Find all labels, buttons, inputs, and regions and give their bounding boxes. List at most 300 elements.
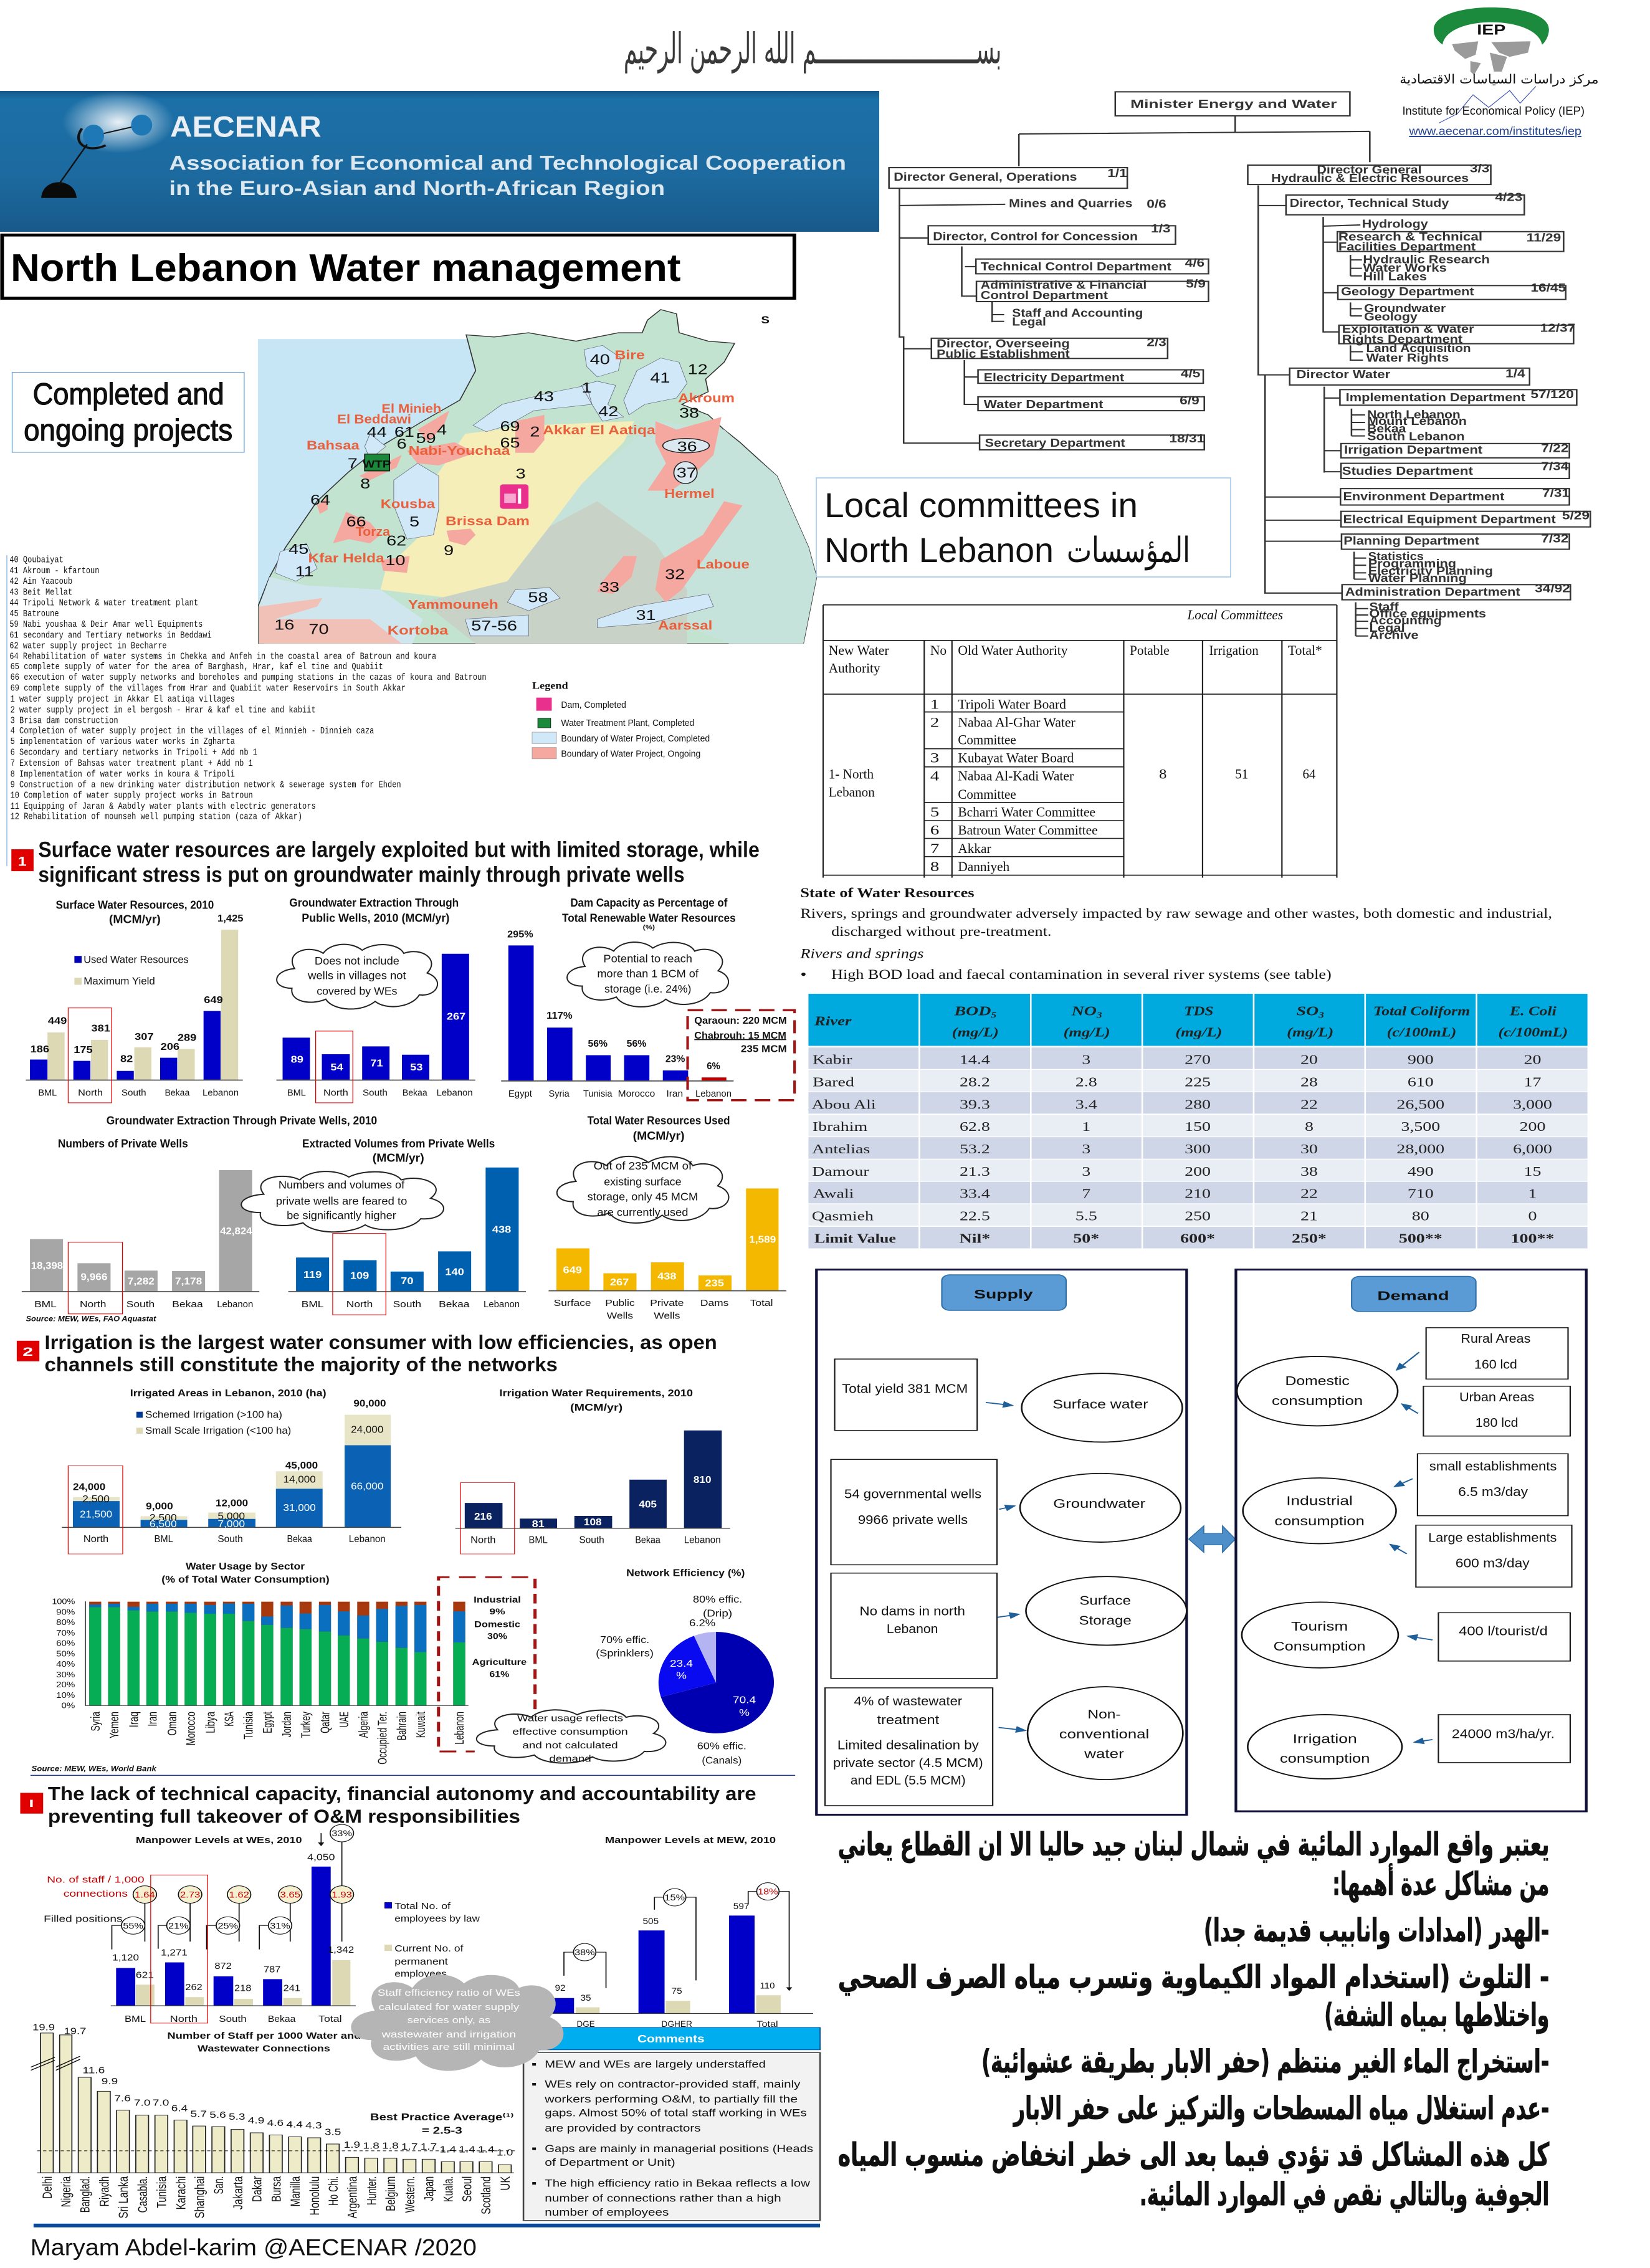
- callout: Lebanon sector shares: Agriculture: [472, 1657, 527, 1667]
- org box: technical control: Technical Control Department: [981, 260, 1171, 273]
- IEP wordmark: IEP: [1477, 22, 1505, 38]
- map project numbers: 61: [394, 424, 414, 440]
- chart: water usage by sector: [52, 1561, 469, 1765]
- demand: irrigation consumption: Irrigation: [1293, 1732, 1357, 1746]
- chart: staff per 1000 connections: UK: [497, 2176, 513, 2191]
- legend item: project completed: [532, 732, 710, 743]
- row: Bared: 17: [1524, 1075, 1541, 1090]
- row: Antelias: 30: [1300, 1142, 1318, 1156]
- chart: staff per 1000 connections: 6.4: [171, 2104, 188, 2113]
- comments text: gaps. Almost 50% of total staff working in WEs: [545, 2107, 807, 2119]
- chart: manpower levels at MEW: Total: [756, 2019, 778, 2029]
- chart: dam capacity: 117%: [546, 1011, 573, 1021]
- map project numbers: 40: [590, 351, 610, 368]
- row: Ibrahim: Ibrahim: [813, 1120, 867, 1134]
- row: Qasmieh: 22.5: [960, 1209, 990, 1224]
- chart: dam capacity: Iran: [667, 1089, 683, 1099]
- chart: irrigation water requirements: South: [579, 1534, 604, 1545]
- chart: irrigated areas: 7,000: [217, 1518, 245, 1529]
- comments text: of Department or Unit): [545, 2156, 675, 2168]
- org sub-items: administration: Archive: [1369, 629, 1419, 642]
- filled position circles: 55%: [123, 1921, 143, 1931]
- map place names: Kousba: [381, 497, 435, 511]
- filled position circles: 21%: [168, 1921, 189, 1931]
- chart: irrigated areas: 24,000: [351, 1424, 383, 1435]
- chart: staff per 1000 connections: Casabla.: [135, 2176, 150, 2213]
- chart: dam capacity: 23%: [665, 1054, 685, 1064]
- org box: research: [1337, 231, 1563, 254]
- text block: state of water resources: Rivers, springs and groundwater adversely impacted by raw sewage and other wastes, both domestic and industrial,: [800, 905, 1552, 921]
- org box: director water: [1290, 368, 1530, 385]
- arabic text block: water sector problems: [838, 1826, 1549, 2213]
- chart: irrigation water requirements: Irrigation Water Requirements, 2010: [499, 1388, 693, 1399]
- chart: network efficiency pie: 70.4: [733, 1694, 756, 1705]
- map project numbers: [274, 351, 708, 637]
- org sub-items: hydraulic research: Hill Lakes: [1363, 270, 1427, 284]
- chart: surface water resources: Surface Water Resources, 2010: [56, 899, 214, 912]
- chart: staff per 1000 connections: Banglad.: [77, 2176, 92, 2213]
- heading: local committees: Local committees in: [824, 485, 1138, 525]
- map project numbers: 59: [416, 430, 436, 446]
- callout: water usage note: [477, 1710, 665, 1764]
- icon: AECENAR logo: [41, 115, 152, 198]
- org sub-items: administration: Staff: [1369, 601, 1399, 614]
- chart: manpower levels at WEs: 1,342: [328, 1945, 354, 1955]
- demand: industrial consumption: 6.5 m3/day: [1458, 1485, 1528, 1499]
- banner subtitle: Association for Economical and Technological Cooperation: [169, 151, 846, 174]
- callout: Lebanon sector shares: [439, 1577, 535, 1751]
- chart: public wells extraction: 54: [330, 1062, 343, 1073]
- chart: extracted volumes: 119: [303, 1270, 322, 1280]
- row: Kabir: 900: [1408, 1053, 1434, 1067]
- table body rows: Committee: [958, 732, 1016, 747]
- row: Damour: 15: [1524, 1165, 1541, 1179]
- chart: private wells numbers: BML: [34, 1299, 57, 1310]
- supply: non-conventional water: private sector (4.5 MCM): [833, 1756, 983, 1770]
- table body rows: Akkar: [958, 841, 991, 856]
- chart: manpower levels at MEW: 35: [581, 1993, 591, 2003]
- row: Qasmieh: 5.5: [1075, 1209, 1097, 1224]
- source note: Source: MEW, WEs, FAO Aquastat: [26, 1315, 156, 1323]
- map project numbers: 9: [444, 542, 454, 558]
- legend item: project ongoing: [532, 748, 700, 759]
- callout: storage potential: storage (i.e. 24%): [604, 984, 691, 996]
- chart: water usage by sector: Libya: [204, 1711, 217, 1733]
- row: Ibrahim: 62.8: [960, 1120, 990, 1134]
- chart: irrigation water requirements: [455, 1388, 730, 1554]
- callout: private wells feared higher: private wells are feared to: [276, 1196, 407, 1208]
- institute link: www.aecenar.com/institutes/iep: [1408, 124, 1581, 138]
- callout: Lebanon sector shares: 30%: [487, 1632, 507, 1641]
- org sub-items: planning: Programming: [1368, 558, 1456, 570]
- chart: staff per 1000 connections: Sri Lanka: [116, 2176, 131, 2218]
- chart: staff per 1000 connections: Argentina: [345, 2176, 360, 2218]
- chart: network efficiency pie: Network Efficiency (%): [626, 1567, 745, 1578]
- supply button: Supply: [974, 1287, 1033, 1302]
- icon: water treatment plant: [363, 454, 391, 471]
- callout: Lebanon sector shares: Domestic: [474, 1619, 520, 1629]
- section heading: channels still constitute the majority of the networks: [45, 1354, 558, 1375]
- row: Qasmieh: Qasmieh: [812, 1209, 874, 1224]
- org box: director water: Director Water: [1297, 368, 1390, 381]
- chart: staff per 1000 connections: Number of Staff per 1000 Water and: [167, 2031, 361, 2041]
- map project numbers: 37: [677, 464, 697, 481]
- annotation: staff per connections: connections: [64, 1889, 128, 1899]
- legend item: project ongoing: Boundary of Water Project, Ongoing: [561, 749, 700, 759]
- row: Abou Ali: 39.3: [960, 1097, 990, 1112]
- org box: irrigation: Irrigation Department: [1344, 444, 1482, 456]
- callout: staff efficiency ratio: Staff efficiency ratio of WEs: [378, 1988, 520, 1998]
- comments text: number of employees: [545, 2206, 669, 2218]
- map place names: El Beddawi: [337, 412, 411, 426]
- chart: surface water resources: 449: [48, 1016, 67, 1026]
- chart: staff per 1000 connections: San.: [211, 2176, 226, 2194]
- org sub-items: groundwater: [1364, 302, 1446, 323]
- chart: private wells numbers: 9,966: [80, 1272, 107, 1282]
- org box: geology: 16/45: [1530, 282, 1566, 294]
- table body rows: 3: [930, 750, 939, 766]
- chart: manpower levels at MEW: DGHER: [661, 2019, 692, 2029]
- demand: domestic consumption: Rural Areas: [1461, 1332, 1530, 1346]
- table caption: Local Committees: [1187, 607, 1283, 622]
- supply: non-conventional water: 4% of wastewater: [854, 1694, 962, 1708]
- annotation: best practice average: [370, 2112, 514, 2136]
- supply: groundwater: [831, 1459, 1181, 1565]
- org sub-items: land acquisition: Land Acquisition: [1366, 342, 1471, 355]
- demand: domestic consumption: 180 lcd: [1476, 1416, 1519, 1430]
- row: Ibrahim: 1: [1082, 1120, 1090, 1134]
- ratio circles: 1.93: [331, 1890, 352, 1900]
- ratio circles: 3.65: [280, 1890, 300, 1900]
- chart: water usage by sector: 90%: [56, 1607, 75, 1616]
- chart: water usage by sector: 100%: [52, 1596, 75, 1606]
- org sub-items: staff and legal: Staff and Accounting: [1012, 307, 1143, 320]
- org box: control for concession: Director, Control for Concession: [933, 230, 1138, 243]
- chart: staff per 1000 connections: 7.6: [114, 2094, 131, 2104]
- org box: electrical equipment: [1341, 510, 1590, 527]
- org box: water department: Water Department: [984, 398, 1104, 411]
- org sub-items: regions: Bekaa: [1367, 422, 1406, 436]
- row: Ibrahim: 150: [1185, 1120, 1211, 1134]
- chart: water usage by sector: Bahrain: [395, 1712, 409, 1740]
- filled position circles: [122, 1824, 353, 1934]
- supply: surface water: [835, 1359, 1182, 1442]
- demand: tourism consumption: 400 l/tourist/d: [1459, 1624, 1548, 1639]
- org box: research: 11/29: [1527, 231, 1561, 244]
- chart: staff per 1000 connections: 1.7: [401, 2142, 417, 2151]
- chart: public wells extraction: Groundwater Extraction Through: [289, 897, 459, 910]
- chart: surface water resources: (MCM/yr): [109, 913, 161, 926]
- panel: comments: ▪: [532, 2059, 536, 2070]
- chart: irrigated areas: North: [83, 1533, 108, 1545]
- map project numbers: 45: [289, 541, 308, 557]
- table body rows: 4: [930, 768, 940, 784]
- chart: extracted volumes: South: [393, 1299, 421, 1310]
- org box: administrative and financial: 5/9: [1186, 278, 1206, 290]
- map project numbers: 4: [437, 421, 447, 438]
- chart: network efficiency pie: 70% effic.: [600, 1634, 649, 1646]
- comments text: WEs rely on contractor-provided staff, mainly: [545, 2078, 801, 2090]
- demand: industrial consumption: Industrial: [1286, 1494, 1353, 1508]
- text block: state of water resources: Rivers and springs: [799, 946, 923, 961]
- map project numbers: 65: [500, 434, 520, 451]
- chart: water usage by sector: 30%: [56, 1670, 75, 1679]
- table body rows: [829, 697, 1316, 874]
- chart: extracted volumes: BML: [302, 1299, 324, 1310]
- org box: planning: 7/32: [1541, 533, 1568, 545]
- table body rows: Batroun Water Committee: [958, 822, 1098, 838]
- map project numbers: 16: [274, 616, 294, 633]
- chart: water usage by sector: 60%: [56, 1638, 75, 1647]
- demand: irrigation consumption: [1247, 1715, 1570, 1779]
- org box: administration: 34/92: [1535, 583, 1570, 595]
- chart: irrigation water requirements: Bekaa: [635, 1534, 660, 1545]
- organisation chart: ministry of energy and water: [889, 92, 1590, 642]
- row: Kabir: Kabir: [813, 1053, 852, 1067]
- chart: manpower levels at WEs: Total: [318, 2014, 342, 2024]
- chart: staff per 1000 connections: 4.6: [267, 2118, 284, 2128]
- chart: surface water resources: 186: [31, 1044, 49, 1055]
- chart: irrigated areas: South: [217, 1533, 243, 1545]
- chart: water usage by sector: Water Usage by Sector: [186, 1561, 305, 1572]
- map place names: Brissa Dam: [446, 513, 530, 528]
- map project numbers: 69: [500, 418, 520, 435]
- chart: network efficiency pie: [596, 1567, 774, 1766]
- org box: secretary: 18/31: [1169, 432, 1204, 445]
- legend item: dam: Dam, Completed: [561, 700, 626, 710]
- chart: total water resources used: 438: [657, 1271, 677, 1282]
- map project numbers: 8: [360, 475, 370, 492]
- chart: water usage by sector: 50%: [56, 1649, 75, 1658]
- chart: irrigated areas: 9,000: [146, 1500, 173, 1512]
- chart: irrigation water requirements: 810: [694, 1474, 711, 1485]
- river table header: Total Coliform: [1373, 1004, 1470, 1019]
- org box: irrigation: [1341, 442, 1570, 458]
- chart: staff per 1000 connections: Karachi: [173, 2176, 188, 2209]
- chart: staff per 1000 connections: 4.4: [286, 2120, 303, 2130]
- chart: network efficiency pie: %: [676, 1670, 687, 1681]
- callout: Qaraoun and Chabrouh dams: [688, 1010, 794, 1100]
- panel: comments: ▪: [532, 2178, 536, 2189]
- row: Abou Ali: 3,000: [1513, 1097, 1552, 1112]
- comments text: workers performing O&M, to partially fill the: [544, 2093, 798, 2105]
- demand: tourism consumption: Consumption: [1274, 1639, 1366, 1654]
- row: Bared: [813, 1075, 1541, 1090]
- panel: comments: ▪: [532, 2078, 536, 2090]
- demand: industrial consumption: 600 m3/day: [1456, 1556, 1530, 1571]
- river table header: 5: [991, 1011, 996, 1020]
- org sub-items: hydraulic research: Hydraulic Research: [1363, 254, 1490, 266]
- org box: studies: 7/34: [1541, 460, 1569, 473]
- main title: North Lebanon Water management: [11, 245, 680, 289]
- map project numbers: 3: [515, 465, 525, 482]
- org box: electricity: 4/5: [1181, 368, 1200, 380]
- row: Antelias: 53.2: [960, 1142, 990, 1156]
- chart: network efficiency pie: (Drip): [703, 1608, 732, 1619]
- chart: staff per 1000 connections: Wastewater Connections: [198, 2044, 330, 2054]
- map project numbers: 70: [308, 621, 329, 637]
- chart: total water resources used: 235: [705, 1278, 724, 1289]
- callout: wells not included: Does not include: [315, 956, 399, 968]
- section number badge: I: [29, 1798, 34, 1809]
- chart: irrigated areas: 90,000: [353, 1398, 386, 1409]
- river table header: BOD: [954, 1004, 991, 1019]
- chart: staff per 1000 connections: Kuala.: [441, 2176, 455, 2202]
- row: Damour: 38: [1300, 1165, 1318, 1179]
- org box: studies: Studies Department: [1342, 465, 1473, 477]
- row: Damour: 490: [1408, 1165, 1434, 1179]
- chart: manpower levels at WEs: [44, 1824, 480, 2024]
- project list: 4 Completion of water supply project in the villages of el Minnieh - Dinnieh caza: [11, 727, 374, 737]
- supply button: [942, 1275, 1066, 1310]
- chart: extracted volumes: [241, 1138, 526, 1315]
- chart: dam capacity: Morocco: [618, 1089, 655, 1099]
- chart: staff per 1000 connections: 4.9: [248, 2115, 264, 2126]
- section heading: [48, 1783, 756, 1827]
- row: Antelias: 3: [1082, 1142, 1090, 1156]
- section number badge: [11, 849, 34, 871]
- banner name: AECENAR: [170, 110, 322, 143]
- chart: network efficiency pie: 6.2%: [689, 1618, 715, 1628]
- demand: industrial consumption: [1243, 1454, 1571, 1587]
- legend item: project completed: Boundary of Water Project, Completed: [561, 733, 710, 743]
- chart: staff per 1000 connections: 1.4: [478, 2145, 495, 2155]
- supply: non-conventional water: and EDL (5.5 MCM): [851, 1773, 966, 1788]
- legend item: treatment plant: Water Treatment Plant, Completed: [561, 718, 694, 728]
- river table header: (mg/L): [952, 1025, 999, 1039]
- supply: surface storage: Surface: [1079, 1594, 1131, 1608]
- river table header: [814, 1004, 1568, 1039]
- callout: wells not included: covered by WEs: [317, 986, 398, 998]
- chart: total water resources used: Public: [605, 1298, 635, 1308]
- row: Kabir: 20: [1524, 1053, 1541, 1067]
- org box: overseeing public establishment: Public Establishment: [937, 348, 1070, 360]
- org box: administration: [1342, 583, 1570, 600]
- map place names: Aarssal: [658, 618, 712, 632]
- supply: non-conventional water: treatment: [877, 1713, 939, 1727]
- chart: public wells extraction: [277, 897, 475, 1103]
- table body rows: Kubayat Water Board: [958, 750, 1074, 766]
- chart: surface water resources: Maximum Yield: [83, 974, 155, 986]
- project list: 64 Rehabilitation of water systems in Chekka and Anfeh in the coastal area of Batroun and koura: [9, 652, 436, 662]
- org sub-items: regions: Mount Lebanon: [1367, 415, 1467, 428]
- chart: total water resources used: 649: [563, 1265, 582, 1275]
- supply: surface storage: Lebanon: [887, 1622, 938, 1636]
- demand: domestic consumption: Domestic: [1285, 1374, 1350, 1388]
- table body rows: 1: [930, 697, 939, 712]
- chart: staff per 1000 connections: Seoul: [459, 2176, 474, 2202]
- chart: manpower levels at MEW: [541, 1835, 813, 2029]
- callout: unused storage: storage, only 45 MCM: [588, 1191, 698, 1203]
- map place names: Bire: [614, 348, 645, 362]
- heading: local committees: [816, 478, 1231, 577]
- chart: irrigated areas: Schemed Irrigation (>100 ha): [145, 1409, 282, 1420]
- chart: water usage by sector: Kuwait: [414, 1712, 428, 1738]
- chart: irrigated areas: 21,500: [80, 1508, 112, 1520]
- icon: dam: [500, 484, 528, 509]
- row: Abou Ali: 22: [1300, 1097, 1318, 1112]
- chart: public wells extraction: South: [363, 1088, 388, 1098]
- row: Kabir: 3: [1082, 1053, 1090, 1067]
- org box: director water: 1/4: [1505, 368, 1525, 380]
- annotation: best practice average: Best Practice Average⁽¹⁾: [370, 2112, 514, 2123]
- org sub-items: planning: Statistics: [1368, 550, 1424, 563]
- chart: irrigated areas: 5,000: [217, 1510, 245, 1522]
- section heading: [38, 838, 760, 887]
- chart: irrigation water requirements: 216: [474, 1511, 492, 1522]
- chart: manpower levels at MEW: 597: [733, 1902, 749, 1911]
- chart: network efficiency pie: 60% effic.: [697, 1740, 746, 1751]
- map project numbers: 38: [679, 404, 699, 421]
- chart: total water resources used: Dams: [700, 1298, 728, 1308]
- chart: staff per 1000 connections: 3.5: [325, 2127, 341, 2137]
- org box: administrative and financial: [976, 278, 1208, 302]
- chart: staff per 1000 connections: Nigeria: [58, 2176, 74, 2207]
- project list: 8 Implementation of water works in koura & Tripoli: [11, 770, 235, 780]
- chart: total water resources used: Private: [650, 1298, 684, 1308]
- chart: water usage by sector: Jordan: [280, 1712, 294, 1737]
- row: Ibrahim: 3,500: [1401, 1120, 1440, 1134]
- map project numbers: 43: [534, 388, 554, 405]
- row: Awali: 710: [1408, 1187, 1434, 1201]
- callout: staff efficiency ratio: services only, as: [408, 2015, 490, 2026]
- chart: private wells numbers: 18,398: [31, 1260, 63, 1271]
- chart: network efficiency pie: 23.4: [670, 1658, 693, 1669]
- org box: overseeing public establishment: 2/3: [1147, 336, 1166, 349]
- chart: manpower levels at WEs: 262: [185, 1982, 203, 1992]
- org box: geology: [1338, 282, 1566, 300]
- chart: extracted volumes: Extracted Volumes from Private Wells: [302, 1138, 495, 1150]
- filled position circles: 25%: [218, 1921, 238, 1931]
- row: Bared: 28: [1300, 1075, 1318, 1090]
- map place names: Kortoba: [388, 623, 448, 637]
- chart: total water resources used: Wells: [607, 1311, 633, 1321]
- source note: Source: MEW, WEs, World Bank: [32, 1765, 157, 1773]
- org sub-items: regions: South Lebanon: [1367, 430, 1464, 443]
- section heading: Irrigation is the largest water consumer with low efficiencies, as open: [45, 1332, 717, 1353]
- annotation: staff per connections: Filled positions: [44, 1914, 123, 1924]
- chart: irrigated areas: Bekaa: [287, 1533, 312, 1545]
- supply: non-conventional water: [825, 1687, 1183, 1806]
- map place names: Hermel: [664, 487, 715, 500]
- chart: staff per 1000 connections: 11.6: [82, 2066, 105, 2075]
- project list: 62 water supply project in Becharre: [9, 641, 167, 652]
- chart legend: employees by law: [394, 1913, 480, 1923]
- section heading: preventing full takeover of O&M responsibilities: [48, 1806, 520, 1827]
- chart: staff per 1000 connections: 7.0: [153, 2097, 169, 2108]
- chart: extracted volumes: 109: [350, 1270, 369, 1281]
- chart: irrigation water requirements: North: [470, 1534, 496, 1545]
- supply: groundwater: Groundwater: [1053, 1497, 1145, 1511]
- chart: private wells numbers: 42,824: [220, 1226, 252, 1237]
- comments header: Comments: [637, 2032, 705, 2045]
- chart: manpower levels at WEs: Manpower Levels at WEs, 2010: [136, 1835, 302, 1846]
- chart: irrigation water requirements: Lebanon: [684, 1534, 721, 1545]
- icon: green crescent: [1434, 7, 1549, 45]
- org sub-items: planning: [1368, 550, 1493, 585]
- chart legend: Current No. of: [394, 1943, 464, 1954]
- row: Abou Ali: Abou Ali: [812, 1097, 876, 1112]
- river table header: 3: [1096, 1011, 1102, 1020]
- org sub-items: land acquisition: [1366, 342, 1471, 364]
- chart: staff per 1000 connections: Bursa: [269, 2176, 284, 2202]
- callout: private wells feared higher: [241, 1171, 444, 1232]
- chart legend: permanent: [394, 1956, 448, 1967]
- row: Bared: 225: [1185, 1075, 1211, 1090]
- river table header: River: [814, 1014, 852, 1029]
- chart legend: Total No. of: [394, 1901, 451, 1911]
- chart: surface water resources: 307: [135, 1031, 154, 1042]
